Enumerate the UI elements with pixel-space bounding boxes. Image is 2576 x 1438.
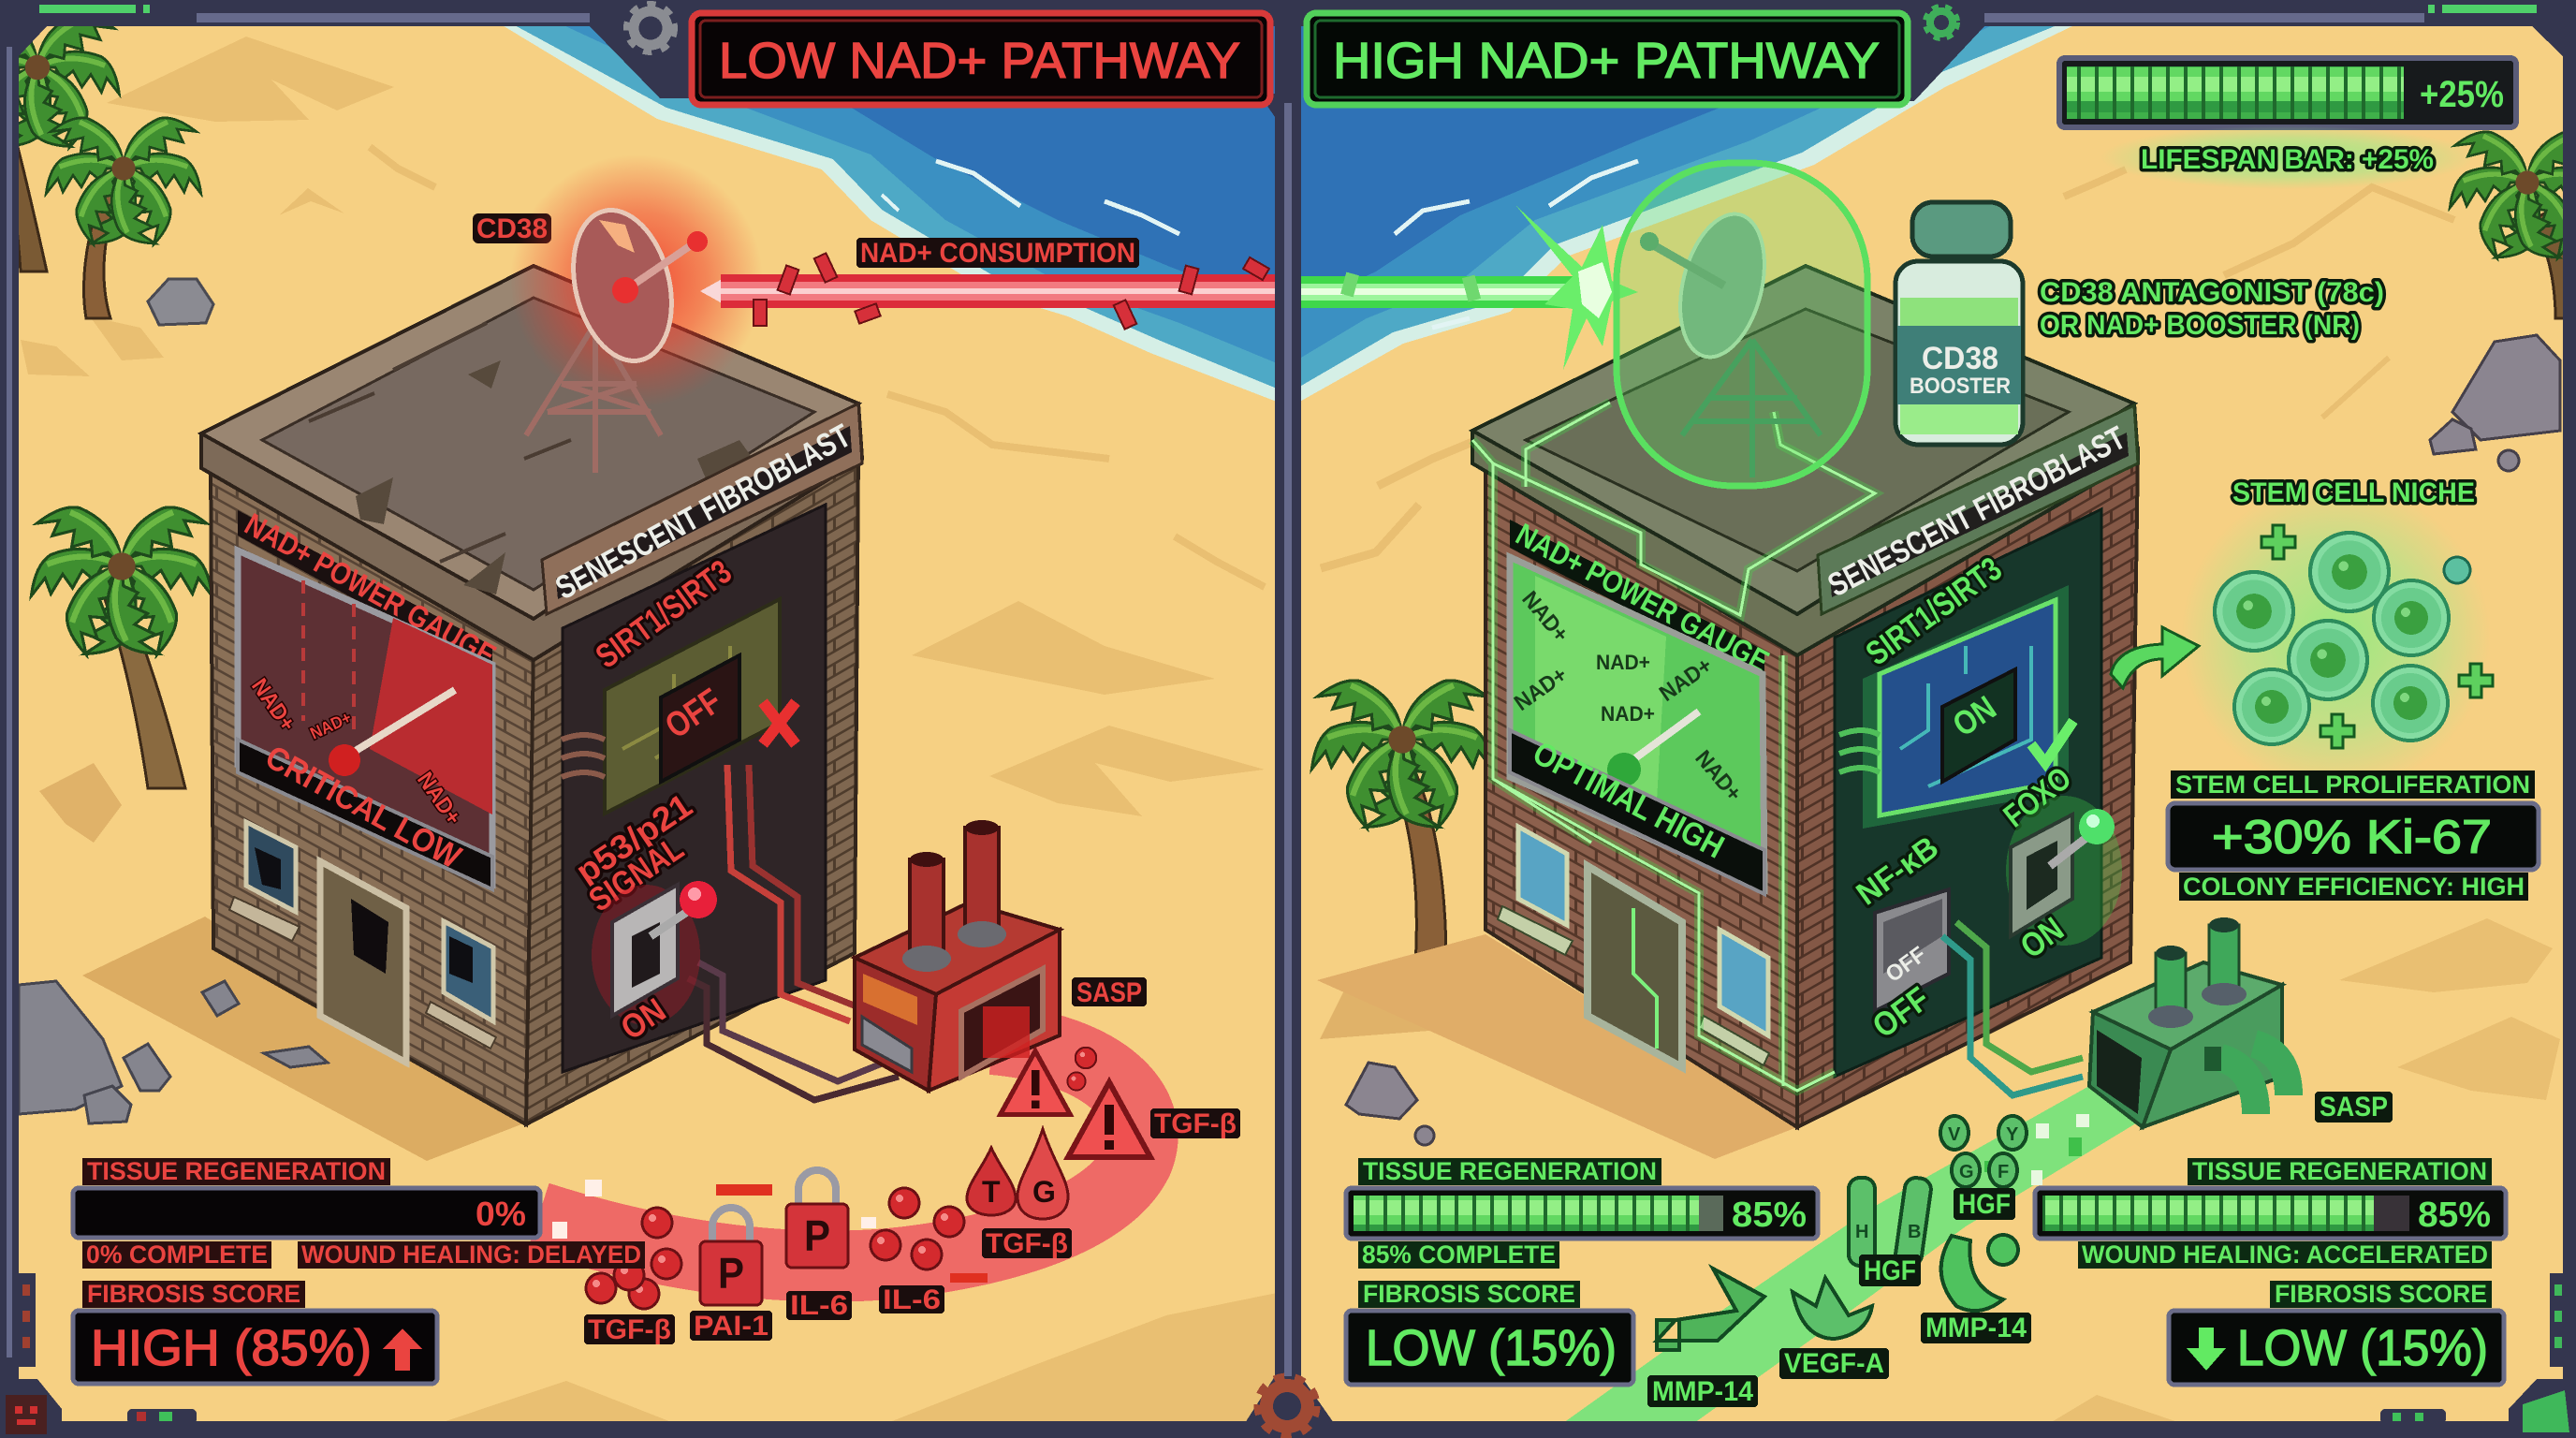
gauge title: NAD+ POWER GAUGE bbox=[240, 506, 502, 673]
label MMP-14 a: MMP-14 bbox=[1925, 1313, 2027, 1343]
ocean left bbox=[501, 24, 1281, 404]
NAD+ consumption red beam bbox=[700, 253, 1281, 330]
rock top left bbox=[148, 279, 213, 325]
proliferation label: STEM CELL PROLIFERATION bbox=[2175, 770, 2530, 799]
palm tree top left near bbox=[46, 103, 201, 318]
side console left bbox=[17, 1273, 36, 1367]
tissue regeneration bar bbox=[73, 1188, 540, 1238]
percent complete: 0% COMPLETE bbox=[86, 1240, 268, 1269]
sign: senescent fibroblast right: SENESCENT FIBROBLAST bbox=[1822, 419, 2131, 604]
MMP-14 claw pipe bbox=[1657, 1269, 1764, 1350]
corner console red bbox=[0, 1379, 62, 1438]
circuit chip SIRT1/SIRT3 off bbox=[562, 552, 796, 814]
right wall bbox=[526, 449, 858, 1124]
IL-6 molecule bbox=[871, 1188, 964, 1269]
NAD+ power gauge green: NAD+ bbox=[1516, 587, 1573, 647]
building: low NAD+ senescent fibroblast bbox=[201, 266, 899, 1124]
fibrosis score label: FIBROSIS SCORE bbox=[2275, 1280, 2487, 1308]
SASP factory high bbox=[2089, 917, 2289, 1127]
switch NF-kB off bbox=[1850, 829, 1949, 1045]
sign: senescent fibroblast: SENESCENT FIBROBLAST bbox=[549, 418, 856, 607]
status light top right bbox=[2428, 5, 2537, 13]
switch p53 on: ON bbox=[614, 990, 672, 1048]
HUD high NAD+ right stats bbox=[2035, 1157, 2506, 1385]
gauge status: CRITICAL LOW bbox=[259, 739, 467, 875]
window left bbox=[1498, 827, 1573, 955]
label SASP: SASP bbox=[1076, 977, 1142, 1008]
fibrosis score low bbox=[1346, 1311, 1633, 1385]
rocks right bbox=[1346, 335, 2560, 1145]
label HGF a: HGF bbox=[1958, 1189, 2011, 1220]
Ki-67 value: +30% Ki-67 bbox=[2212, 811, 2492, 863]
tissue regeneration label: TISSUE REGENERATION bbox=[87, 1157, 386, 1185]
building shadow right bbox=[1317, 934, 1797, 1159]
door bbox=[1588, 866, 1682, 1067]
neon repair circuit lines bbox=[1472, 403, 1875, 1091]
switch FOXO on: FOXO bbox=[1998, 760, 2078, 834]
switch p53 on bbox=[592, 881, 717, 1048]
colony efficiency: COLONY EFFICIENCY: HIGH bbox=[2183, 873, 2525, 901]
fibrosis score low with arrow: LOW (15%) bbox=[2237, 1320, 2488, 1376]
label SASP: SASP bbox=[2320, 1092, 2388, 1123]
door bbox=[320, 861, 406, 1063]
NAD+ power gauge green: NAD+ bbox=[1655, 653, 1717, 707]
gear right bbox=[1925, 7, 1957, 38]
fibrosis score high: HIGH (85%) bbox=[91, 1320, 372, 1376]
NAD+ power gauge green: NAD+ bbox=[1596, 651, 1650, 674]
NAD+ power gauge: NAD+ bbox=[412, 768, 466, 829]
TGF drops: T bbox=[982, 1175, 1001, 1209]
growth factor HGF molecule: Y bbox=[2006, 1124, 2019, 1145]
NAD+ power gauge green: NAD+ bbox=[1510, 662, 1572, 716]
growth factor HGF molecule: V bbox=[1948, 1124, 1961, 1145]
window right bbox=[1699, 930, 1769, 1065]
TGF drops bbox=[967, 1129, 1068, 1219]
NAD+ power gauge green bbox=[1510, 517, 1775, 894]
title high NAD+ pathway bbox=[1307, 13, 1908, 105]
wound healing delayed: WOUND HEALING: DELAYED bbox=[301, 1240, 641, 1269]
building: high NAD+ fibroblast bbox=[1472, 266, 2138, 1127]
NAD+ power gauge: NAD+ bbox=[307, 708, 354, 743]
title low NAD+ pathway bbox=[692, 13, 1270, 105]
HUD low NAD+ stats bbox=[73, 1157, 645, 1384]
percent complete: 85% COMPLETE bbox=[1362, 1240, 1556, 1269]
warning triangles bbox=[1001, 1051, 1150, 1157]
switch NF-kB off: NF-κB bbox=[1850, 829, 1945, 912]
red labels bbox=[473, 213, 1240, 1345]
fibrosis score high bbox=[73, 1311, 437, 1384]
stem cell niche bbox=[2111, 477, 2493, 791]
label TGF-beta 1: TGF-β bbox=[1154, 1108, 1237, 1139]
stream particles bbox=[1984, 1114, 2089, 1185]
stem cell proliferation panel bbox=[2168, 770, 2539, 901]
fibrosis score label: FIBROSIS SCORE bbox=[87, 1280, 300, 1308]
fibrosis score low with arrow bbox=[2169, 1311, 2504, 1385]
right wall bbox=[1797, 449, 2138, 1127]
label HGF b: HGF bbox=[1864, 1255, 1916, 1286]
green dark wall panel bbox=[1835, 509, 2101, 1077]
palm tree mid right bbox=[1311, 663, 1493, 1039]
NAD+ power gauge green: NAD+ bbox=[1690, 746, 1747, 806]
ocean right bbox=[1296, 24, 2076, 404]
circuit chip SIRT1/SIRT3 on: ON bbox=[1946, 688, 2003, 744]
left wall bbox=[211, 459, 534, 1124]
booster bottle bbox=[1895, 202, 2023, 445]
circuit chip SIRT1/SIRT3 off: SIRT1/SIRT3 bbox=[589, 552, 739, 675]
TGF drops: G bbox=[1032, 1175, 1056, 1209]
gear bottom center bbox=[1258, 1377, 1316, 1435]
side console right bbox=[2550, 1273, 2567, 1367]
tissue regeneration label: TISSUE REGENERATION bbox=[2192, 1157, 2487, 1185]
window right bbox=[426, 921, 496, 1049]
fibrosis score label: FIBROSIS SCORE bbox=[1363, 1280, 1575, 1308]
red wires bbox=[688, 765, 899, 1100]
stem cells bbox=[2215, 525, 2493, 748]
label IL-6 b: IL-6 bbox=[790, 1290, 848, 1321]
arrow to niche bbox=[2111, 627, 2199, 688]
small console right bbox=[2380, 1409, 2446, 1424]
left wall bbox=[1486, 449, 1797, 1127]
growth factor HGF Y-shape: B bbox=[1908, 1222, 1921, 1242]
label TGF-beta 2: TGF-β bbox=[986, 1228, 1068, 1259]
Ki-67 value bbox=[2168, 803, 2539, 870]
tissue regeneration bar: 85% bbox=[2418, 1196, 2491, 1235]
wound healing accelerated: WOUND HEALING: ACCELERATED bbox=[2082, 1240, 2488, 1269]
building shadow left bbox=[82, 917, 526, 1161]
gauge status: OPTIMAL HIGH bbox=[1527, 735, 1730, 866]
TGF molecule bbox=[586, 1048, 1096, 1309]
palm tree top left far bbox=[0, 0, 119, 271]
tissue regeneration bar bbox=[2035, 1188, 2506, 1239]
lifespan bar: +25% bbox=[2420, 74, 2504, 115]
cd38 antagonist label: CD38 ANTAGONIST (78c) bbox=[2040, 277, 2384, 308]
tissue regeneration bar bbox=[1346, 1188, 1818, 1239]
circuit chip SIRT1/SIRT3 on: SIRT1/SIRT3 bbox=[1859, 550, 2009, 672]
growth factor HGF Y-shape: H bbox=[1855, 1222, 1868, 1242]
window left bbox=[229, 822, 300, 941]
label IL-6 a: IL-6 bbox=[883, 1284, 941, 1315]
sign: senescent fibroblast bbox=[542, 404, 862, 614]
green SASP stream bbox=[1563, 1086, 2144, 1423]
booster bottle: CD38 bbox=[1922, 341, 1998, 376]
CD38 dish shielded with dome bbox=[1617, 163, 1867, 486]
roof bbox=[1472, 266, 2138, 655]
NAD+ power gauge bbox=[238, 506, 502, 889]
gear left bbox=[627, 5, 674, 51]
growth factor HGF molecule: G bbox=[1959, 1162, 1974, 1182]
title high NAD+ pathway: HIGH NAD+ PATHWAY bbox=[1333, 33, 1880, 89]
tissue regeneration label: TISSUE REGENERATION bbox=[1363, 1157, 1657, 1185]
status light top left bbox=[39, 5, 150, 13]
growth factor HGF molecule: F bbox=[1998, 1162, 2009, 1182]
CD38 dish left with glow bbox=[510, 154, 763, 473]
circuit chip SIRT1/SIRT3 on bbox=[1839, 550, 2073, 829]
label CD38: CD38 bbox=[476, 213, 548, 244]
sign: senescent fibroblast right bbox=[1818, 405, 2138, 614]
switch NF-kB off: OFF bbox=[1866, 979, 1936, 1045]
teal wires bbox=[1942, 922, 2083, 1095]
palm tree mid left bbox=[31, 490, 212, 843]
label MMP-14 b: MMP-14 bbox=[1652, 1376, 1753, 1407]
lifespan label bbox=[2100, 125, 2475, 189]
label p53/p21 signal: p53/p21 bbox=[569, 785, 699, 891]
growth factor HGF molecule bbox=[1940, 1116, 2027, 1187]
switch FOXO on: ON bbox=[2013, 909, 2071, 965]
locks bbox=[700, 1170, 848, 1305]
niche title: STEM CELL NICHE bbox=[2232, 477, 2475, 508]
cd38 antagonist label: OR NAD+ BOOSTER (NR) bbox=[2040, 310, 2360, 341]
small console left bbox=[127, 1409, 197, 1424]
NAD+ power gauge green: NAD+ bbox=[1601, 702, 1655, 726]
tissue regeneration bar: 85% bbox=[1732, 1196, 1807, 1235]
label VEGF-A: VEGF-A bbox=[1784, 1348, 1884, 1379]
title low NAD+ pathway: LOW NAD+ PATHWAY bbox=[719, 33, 1240, 89]
palm tree top right bbox=[2450, 117, 2576, 318]
dark wall panel bbox=[563, 505, 826, 1072]
SASP factory low bbox=[855, 820, 1060, 1091]
lifespan label: LIFESPAN BAR: +25% bbox=[2141, 144, 2434, 175]
label TGF-beta 3: TGF-β bbox=[588, 1314, 671, 1345]
red SASP stream bbox=[538, 1039, 1143, 1283]
roof bbox=[201, 266, 862, 660]
HUD high NAD+ left stats bbox=[1346, 1157, 1818, 1385]
growth factor HGF Y-shape bbox=[1849, 1177, 1932, 1267]
gauge title: NAD+ POWER GAUGE bbox=[1511, 517, 1775, 679]
corner console green bbox=[2509, 1379, 2576, 1438]
booster bottle: BOOSTER bbox=[1910, 374, 2011, 399]
label p53/p21 signal: SIGNAL bbox=[582, 829, 690, 919]
switch FOXO on bbox=[1998, 760, 2122, 965]
high NAD+ green beam bbox=[1296, 206, 1638, 370]
lifespan bar bbox=[2059, 58, 2516, 127]
VEGF-A shape bbox=[1793, 1278, 1872, 1339]
green labels bbox=[1647, 1092, 2393, 1407]
switch NF-kB off: OFF bbox=[1881, 942, 1931, 988]
fibrosis score low: LOW (15%) bbox=[1366, 1320, 1617, 1376]
cd38 antagonist label bbox=[2040, 277, 2384, 341]
MMP-14 crescent bbox=[1941, 1235, 2018, 1311]
tissue regeneration bar: 0% bbox=[476, 1195, 526, 1233]
NAD+ power gauge: NAD+ bbox=[246, 674, 300, 736]
label NAD+ consumption: NAD+ CONSUMPTION bbox=[860, 238, 1135, 269]
label PAI-1: PAI-1 bbox=[694, 1311, 768, 1342]
circuit chip SIRT1/SIRT3 off: OFF bbox=[659, 682, 728, 746]
rocks bottom left bbox=[19, 981, 328, 1123]
